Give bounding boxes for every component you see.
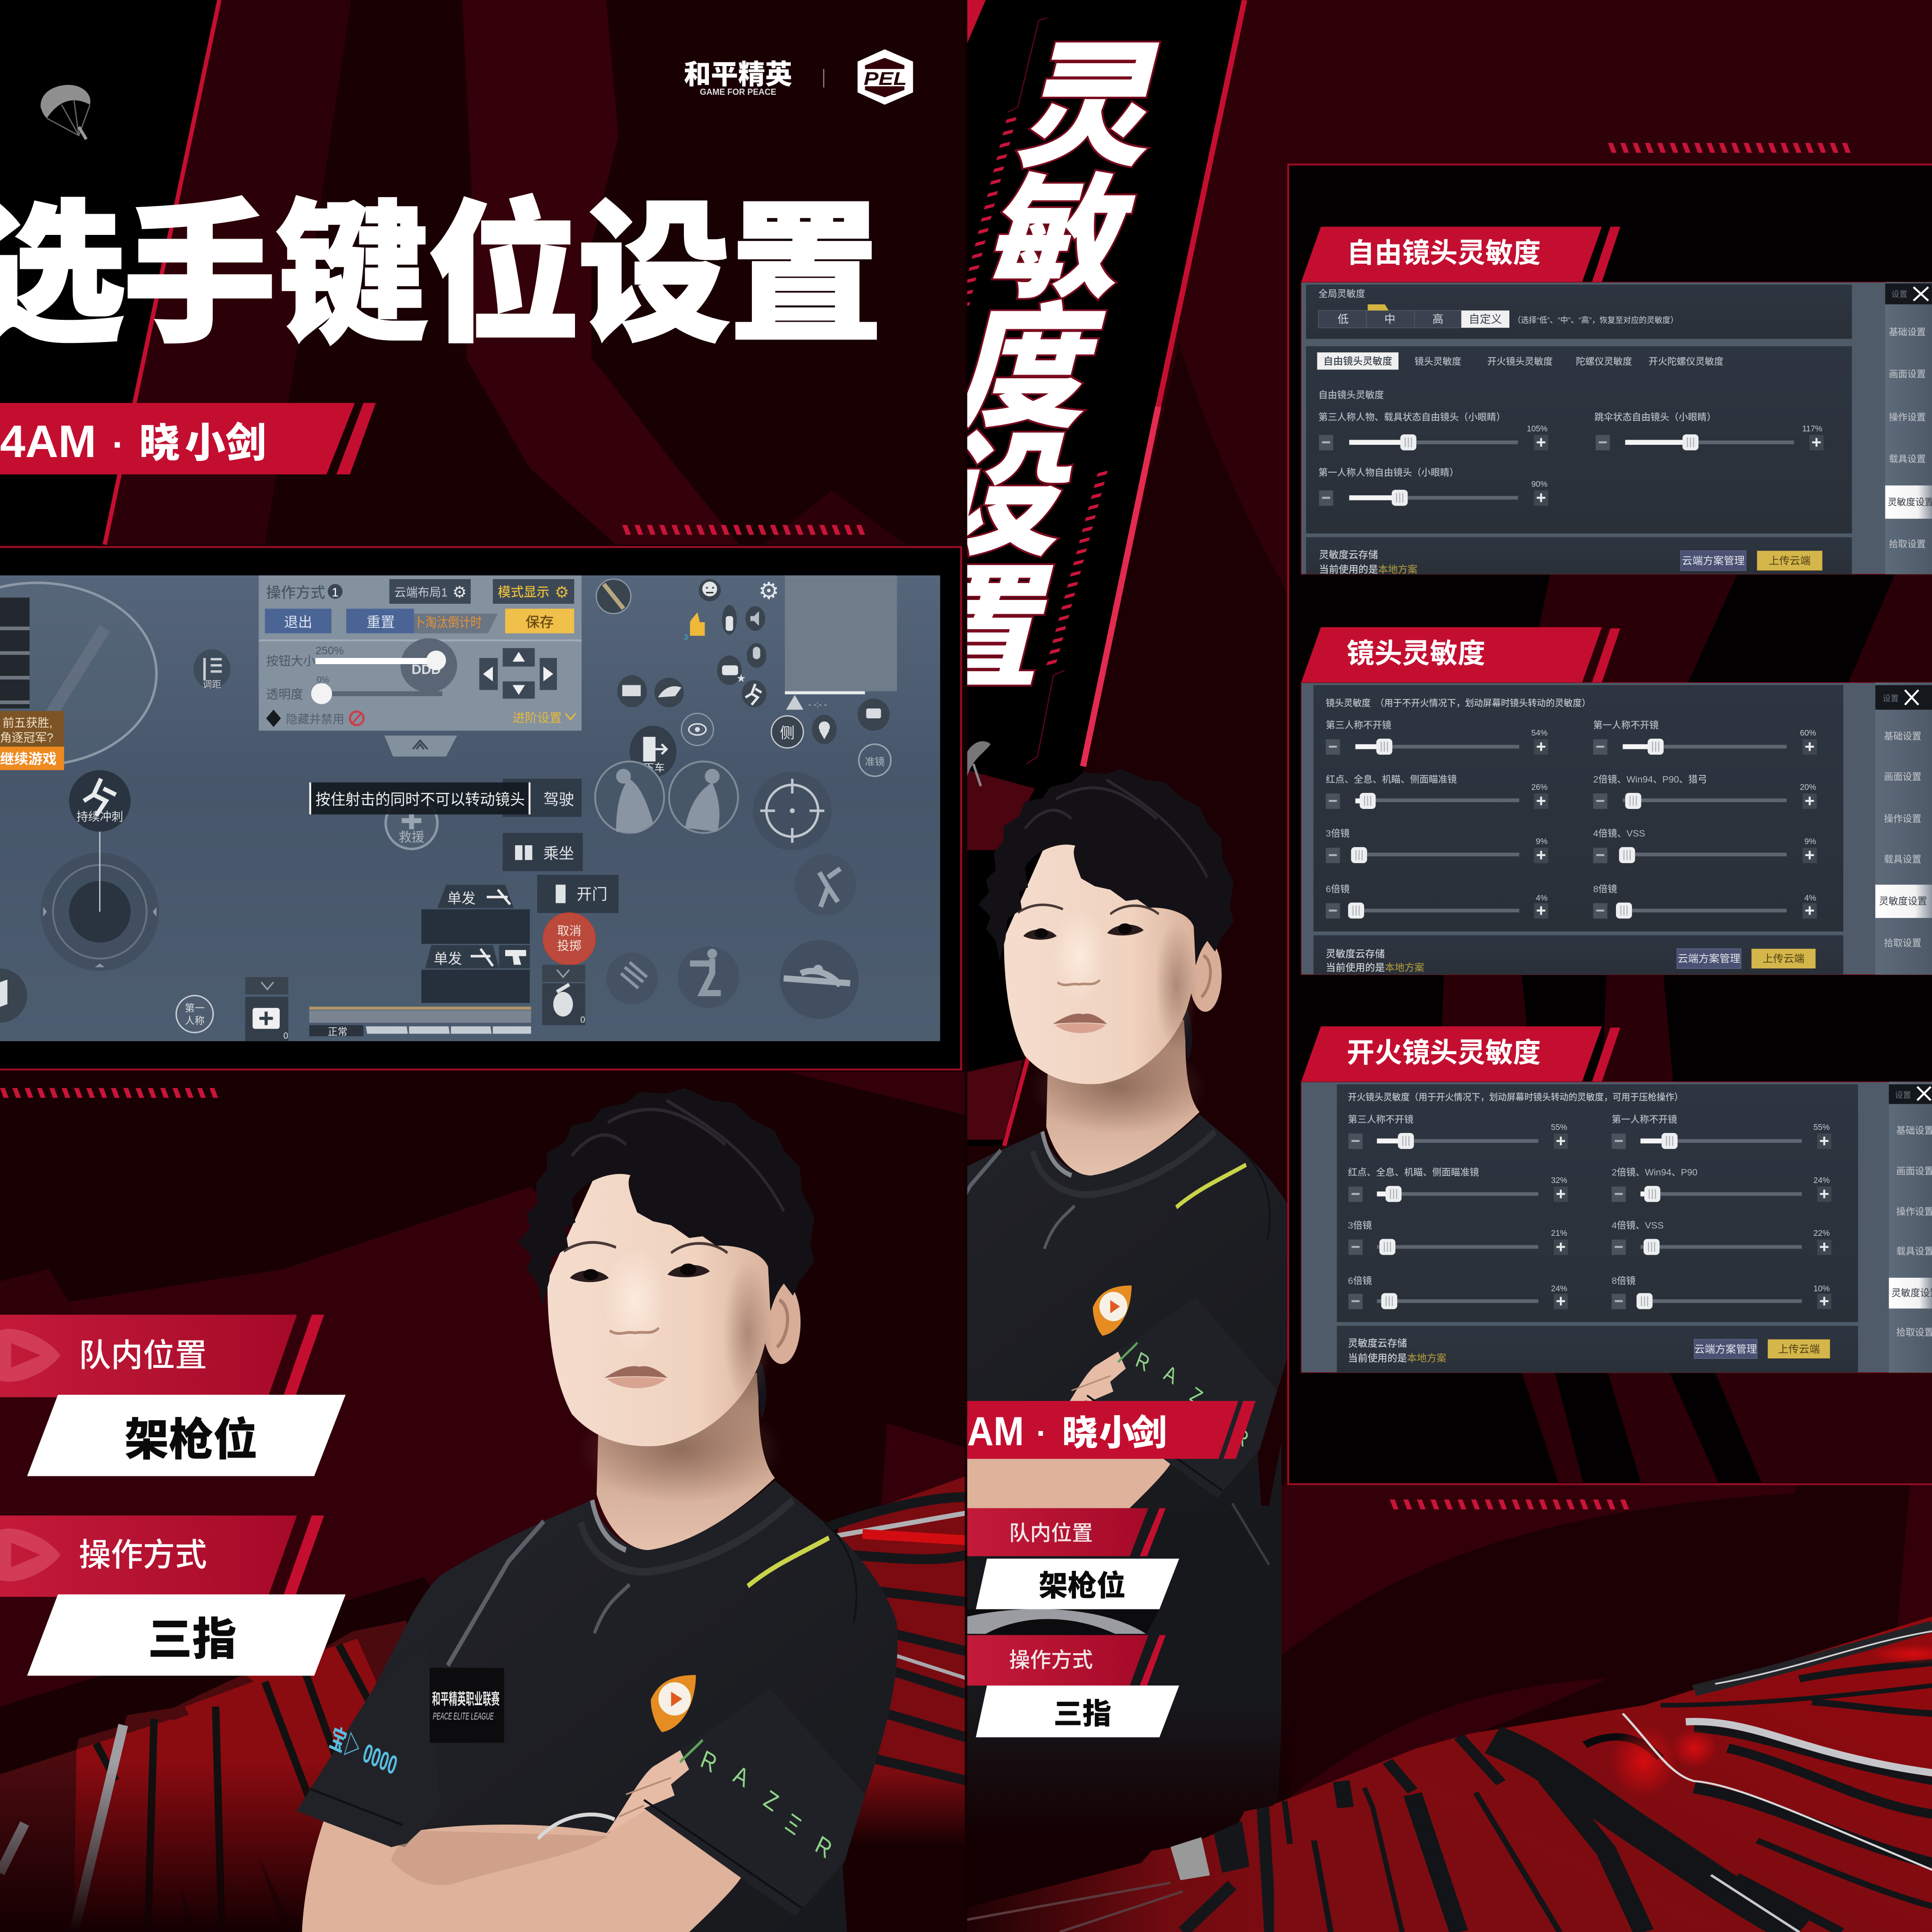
slider row: 4x 9% [1593, 829, 1817, 863]
rescue button: 救援 [399, 830, 425, 844]
panel: free camera sensitivity: 中 [1384, 313, 1395, 325]
settings panel: 0% [316, 675, 329, 684]
slider row: firing first person 55% [1612, 1115, 1832, 1149]
position value left [27, 1395, 346, 1476]
drive button [503, 779, 582, 817]
icon: parachute right [966, 741, 991, 786]
name banner left: 4AM [0, 416, 96, 467]
settings panel: 保存 [525, 615, 554, 631]
settings panel: 模式显示 [498, 584, 550, 599]
slider row: 2x 20% [1593, 774, 1817, 809]
seat button: 乘坐 [543, 845, 574, 862]
panel: free camera sensitivity: 操作设置 [1889, 412, 1926, 423]
right frame: sensitivity screenshots [1288, 165, 1932, 1484]
logo: PEL: PEL [864, 69, 907, 89]
slider row: firing third person 55%: 第三人称不开镜 [1348, 1115, 1414, 1125]
drive button: 驾驶 [543, 791, 574, 808]
slider row: third person no scope 54%: 第三人称不开镜 [1326, 720, 1391, 731]
panel: free camera sensitivity: 基础设置 [1889, 327, 1926, 338]
panel: free camera sensitivity [1301, 227, 1932, 575]
slider row: parachute free look 117%: 跳伞状态自由镜头（小眼睛） [1594, 412, 1716, 423]
name banner left: · [112, 424, 125, 465]
rescue button [386, 797, 437, 849]
position value right [976, 1558, 1179, 1609]
slider row: red dot 26%: 26% [1531, 782, 1548, 791]
grenade slot: 0 [580, 1015, 585, 1024]
ribbon continuation under right portrait [967, 1801, 1294, 1932]
slider row: 3x 9%: 3倍镜 [1326, 829, 1350, 839]
settings panel: 隐藏并禁用 [286, 713, 344, 726]
settings panel [259, 575, 582, 731]
lean toggle button [771, 716, 803, 748]
vertical title: sensitivity settings: 度 [941, 260, 1124, 454]
settings panel: 250% [316, 644, 344, 657]
slider row: firing 6x 24%: 24% [1551, 1284, 1567, 1293]
panel: free camera sensitivity: 自由镜头灵敏度 [1324, 356, 1392, 367]
right panel background [967, 0, 1932, 1932]
slider row: firing red dot 32%: 红点、全息、机瞄、侧面瞄准镜 [1348, 1167, 1479, 1178]
top right icons cluster: ⚙ [758, 578, 779, 604]
jump button [795, 854, 857, 916]
lean toggle button: 侧 [780, 725, 795, 741]
fire mode slot 2 [421, 945, 530, 1003]
panel: firing camera sensitivity: 开火镜头灵敏度（用于开火情况下，划动屏幕时镜头转动的灵敏度，可用于压枪操作） [1348, 1092, 1683, 1103]
panel: free camera sensitivity: 镜头灵敏度 [1415, 357, 1461, 367]
panel: camera sensitivity: 载具设置 [1884, 855, 1922, 865]
slider row: firing 3x 21%: 21% [1551, 1228, 1567, 1238]
slider row: 8x 4% [1593, 884, 1817, 918]
sprint button: 持续冲刺 [76, 810, 123, 824]
control value right: 三指 [1053, 1690, 1111, 1732]
title: player key settings: 选手键位设置 [0, 151, 882, 372]
hazard stripes top of right frame [1608, 143, 1851, 153]
slider row: firing 6x 24%: 6倍镜 [1348, 1276, 1372, 1286]
slider row: red dot 26%: 红点、全息、机瞄、侧面瞄准镜 [1326, 774, 1457, 785]
lean right button [669, 761, 738, 833]
control value right [976, 1686, 1179, 1737]
panel: free camera sensitivity: 开火镜头灵敏度 [1487, 357, 1553, 367]
slider row: 2x 20%: 20% [1800, 782, 1816, 791]
exit vehicle button: 下车 [644, 762, 665, 774]
slider row: firing 2x 24%: 2倍镜、Win94、P90 [1612, 1167, 1698, 1178]
slider row: firing red dot 32% [1348, 1167, 1568, 1202]
distance button: 调距 [203, 680, 221, 690]
settings panel: ⚙ [555, 583, 569, 601]
slider row: 6x 4%: 6倍镜 [1326, 884, 1350, 894]
hazard stripes top [622, 525, 865, 535]
chat button [858, 699, 890, 731]
crouch button [678, 946, 739, 1008]
header: free camera [1301, 227, 1620, 282]
panel: free camera sensitivity: 画面设置 [1889, 369, 1926, 379]
slider row: 6x 4% [1326, 884, 1548, 918]
panel: free camera sensitivity: 自由镜头灵敏度 [1318, 390, 1384, 400]
door button: 开门 [577, 885, 608, 903]
seat button [503, 833, 583, 871]
vertical title: sensitivity settings: 敏 [974, 131, 1156, 325]
first person button [176, 996, 213, 1033]
orange popup: 前五获胜, [2, 716, 52, 730]
settings panel: 透明度 [266, 687, 303, 701]
collapse tab [384, 736, 457, 757]
panel: free camera sensitivity: 拾取设置 [1889, 539, 1926, 550]
position label right: 队内位置 [1009, 1516, 1093, 1546]
settings panel: 卜淘汰倒计时 [414, 616, 482, 631]
slider row: firing 3x 21% [1348, 1220, 1568, 1255]
slider row: parachute free look 117% [1594, 412, 1824, 450]
distance button [193, 650, 230, 690]
panel: free camera sensitivity: （选择“低”、“中”、“高”，恢复至对应的灵敏度） [1513, 316, 1678, 325]
slider row: first person free look 90% [1318, 467, 1548, 506]
header: camera: 镜头灵敏度 [1347, 631, 1485, 671]
name banner left: 晓小剑 [139, 410, 266, 469]
name banner right [967, 1401, 1256, 1459]
slider row: first person no scope 60% [1593, 720, 1817, 755]
fire mode slot 1 [421, 885, 530, 944]
panel: camera sensitivity: 上传云端 [1763, 953, 1805, 965]
orange popup [0, 711, 64, 770]
slider row: firing first person 55%: 第一人称不开镜 [1612, 1115, 1677, 1125]
scope button [859, 744, 891, 776]
orange popup: 继续游戏 [0, 752, 57, 767]
cancel throw button: 投掷 [557, 939, 581, 953]
slider row: firing third person 55% [1348, 1115, 1568, 1149]
logo: game for peace: 和平精英 [684, 52, 792, 92]
panel: firing camera sensitivity: 上传云端 [1778, 1343, 1820, 1355]
logo: PEL [858, 49, 913, 105]
control value left: 三指 [148, 1604, 237, 1668]
slider row: 8x 4%: 8倍镜 [1593, 884, 1617, 894]
left compass ring and weapon circle [0, 583, 157, 765]
status bar [309, 1007, 531, 1037]
slider row: firing 6x 24% [1348, 1276, 1568, 1309]
logo: game for peace: GAME FOR PEACE [700, 87, 776, 97]
name banner right: AM [967, 1409, 1024, 1454]
game screenshot frame [0, 547, 961, 1069]
position value right: 架枪位 [1039, 1562, 1125, 1604]
slider row: parachute free look 117%: 117% [1802, 424, 1823, 433]
slider row: 3x 9%: 9% [1536, 836, 1548, 846]
header: camera [1301, 627, 1620, 683]
slider row: third person no scope 54% [1326, 720, 1548, 755]
door button [537, 875, 618, 913]
exit vehicle button [630, 726, 676, 777]
slider row: 8x 4%: 4% [1805, 893, 1816, 903]
grenade slot [542, 965, 585, 1025]
slider row: first person free look 90%: 第一人称人物自由镜头（小眼睛） [1318, 467, 1459, 478]
slider row: firing 4x 22%: 4倍镜、VSS [1612, 1220, 1664, 1231]
fire mode slot 2: 单发 [434, 951, 462, 967]
panel: firing camera sensitivity: 设置 [1895, 1091, 1911, 1100]
panel: free camera sensitivity: 自定义 [1469, 313, 1502, 325]
panel: firing camera sensitivity: 当前使用的是本地方案 [1348, 1353, 1447, 1364]
slider row: third person free look 105%: 105% [1527, 424, 1548, 433]
first person button: 第一 [185, 1003, 205, 1014]
vertical title: sensitivity settings: 置 [895, 520, 1077, 714]
panel: free camera sensitivity: 开火陀螺仪灵敏度 [1649, 357, 1724, 367]
slider row: firing 4x 22%: 22% [1814, 1228, 1830, 1238]
slider row: firing 2x 24%: 24% [1814, 1175, 1830, 1185]
slider row: firing red dot 32%: 32% [1551, 1175, 1567, 1185]
lean left button [595, 761, 664, 833]
slider row: firing 2x 24% [1612, 1167, 1832, 1202]
panel: free camera sensitivity: 灵敏度云存储 [1319, 550, 1378, 560]
panel: camera sensitivity: 灵敏度云存储 [1326, 949, 1385, 960]
map pin button [812, 715, 837, 744]
panel: firing camera sensitivity: 灵敏度云存储 [1348, 1338, 1407, 1349]
minimap [785, 575, 897, 710]
vertical title: sensitivity settings: 设 [915, 388, 1097, 583]
left weapon strip [0, 598, 30, 708]
left ribbon graphic [0, 1476, 966, 1932]
settings panel: 云端布局1 [394, 586, 448, 599]
slider row: third person free look 105% [1318, 412, 1548, 450]
panel: free camera sensitivity: 上传云端 [1769, 555, 1811, 566]
eye button [682, 713, 713, 745]
slider row: 3x 9% [1326, 829, 1548, 863]
scope button: 准镜 [865, 757, 885, 767]
panel: firing camera sensitivity [1301, 1026, 1932, 1373]
vertical title: sensitivity settings [967, 41, 1161, 687]
inventory cube [0, 968, 27, 1023]
panel: free camera sensitivity: 高 [1432, 313, 1443, 325]
tooltip: cannot rotate camera while firing [309, 783, 531, 815]
name banner left [0, 403, 376, 475]
settings panel: 按钮大小 [266, 654, 316, 668]
position label left: 队内位置 [79, 1329, 207, 1376]
status bar: 正常 [328, 1026, 348, 1037]
panel: camera sensitivity: 灵敏度设置 [1879, 896, 1927, 907]
slider row: 6x 4%: 4% [1536, 893, 1548, 903]
panel: free camera sensitivity: 低 [1338, 313, 1349, 325]
panel: free camera sensitivity: 当前使用的是本地方案 [1319, 565, 1417, 575]
slider row: firing 8x 10% [1612, 1276, 1832, 1309]
reload button [606, 952, 658, 1004]
aim button [753, 771, 832, 850]
settings panel: 操作方式 [266, 584, 325, 601]
panel: firing camera sensitivity: 云端方案管理 [1694, 1343, 1757, 1355]
top right icons cluster [596, 578, 779, 707]
settings panel: 退出 [284, 615, 312, 631]
panel: camera sensitivity: 镜头灵敏度 （用于不开火情况下，划动屏幕时镜头转动的灵敏度） [1326, 698, 1591, 708]
position value left: 架枪位 [125, 1404, 258, 1468]
panel: free camera sensitivity: 全局灵敏度 [1318, 289, 1365, 300]
name banner right: 晓小剑 [1062, 1404, 1167, 1456]
icon: parachute left [41, 85, 91, 139]
slider row: 4x 9%: 9% [1805, 836, 1816, 846]
settings panel: ⚙ [452, 583, 467, 601]
lower torso of right portrait [967, 1441, 1282, 1836]
control label left [0, 1516, 324, 1597]
sprint button [69, 770, 131, 832]
position label left [0, 1315, 324, 1397]
control label right: 操作方式 [1009, 1642, 1093, 1673]
title side stripes upper [967, 117, 1017, 306]
minimap: - -:- - [808, 699, 827, 709]
medkit slot: 0 [283, 1031, 288, 1041]
hazard stripes under game frame [0, 1088, 218, 1098]
cancel throw button [543, 913, 595, 965]
panel: camera sensitivity: 当前使用的是本地方案 [1326, 962, 1424, 973]
first person button: 人称 [185, 1016, 205, 1026]
panel: camera sensitivity: 操作设置 [1884, 814, 1922, 824]
slider row: third person no scope 54%: 54% [1531, 728, 1548, 738]
settings panel: 1 [332, 585, 339, 599]
slider row: first person no scope 60%: 第一人称不开镜 [1593, 720, 1659, 731]
settings panel: DDD [411, 662, 441, 677]
panel: free camera sensitivity: 云端方案管理 [1682, 555, 1745, 566]
slider row: third person free look 105%: 第三人称人物、载具状态自由镜头（小眼睛） [1318, 412, 1506, 423]
thin title bracket lines [1008, 18, 1065, 764]
fire mode slot 1: 单发 [447, 891, 475, 907]
panel: camera sensitivity: 云端方案管理 [1678, 953, 1740, 965]
slider row: red dot 26% [1326, 774, 1548, 809]
panel: camera sensitivity: 拾取设置 [1884, 938, 1922, 949]
slider row: firing 4x 22% [1612, 1220, 1832, 1255]
right ribbon graphic [1274, 1616, 1932, 1932]
settings panel: 进阶设置 [513, 711, 562, 725]
prone button [780, 940, 859, 1019]
medkit slot [245, 977, 288, 1041]
top right icons cluster: ★ [737, 674, 745, 683]
control label left: 操作方式 [79, 1529, 207, 1575]
slider row: firing first person 55%: 55% [1814, 1122, 1830, 1132]
top right icons cluster: 3 [684, 633, 688, 641]
movement joystick [41, 825, 159, 971]
panel: free camera sensitivity: 设置 [1891, 290, 1907, 299]
header: free camera: 自由镜头灵敏度 [1347, 230, 1541, 270]
player portrait left [297, 1088, 898, 1932]
settings panel: 重置 [366, 615, 395, 631]
player portrait right [967, 769, 1290, 1799]
control label right [967, 1635, 1166, 1686]
position label right [967, 1508, 1166, 1556]
slider row: firing third person 55%: 55% [1551, 1122, 1567, 1132]
tooltip: cannot rotate camera while firing: 按住射击的同时不可以转动镜头 [316, 791, 525, 808]
control value left [27, 1594, 346, 1676]
title side stripes lower [1046, 471, 1108, 666]
panel: camera sensitivity: 画面设置 [1884, 772, 1922, 783]
slider row: first person no scope 60%: 60% [1800, 728, 1816, 738]
vertical title: sensitivity settings: 灵 [1004, 0, 1187, 193]
panel: camera sensitivity [1301, 627, 1932, 974]
slider row: firing 8x 10%: 8倍镜 [1612, 1276, 1636, 1286]
slider row: 4x 9%: 4倍镜、VSS [1593, 829, 1645, 839]
slider row: 2x 20%: 2倍镜、Win94、P90、猎弓 [1593, 774, 1707, 785]
panel: free camera sensitivity: 载具设置 [1889, 454, 1926, 465]
header: firing camera [1301, 1026, 1620, 1082]
slider row: firing 3x 21%: 3倍镜 [1348, 1220, 1372, 1231]
divider between logos [823, 69, 824, 87]
left panel background [0, 0, 965, 1707]
header: firing camera: 开火镜头灵敏度 [1347, 1030, 1541, 1070]
cancel throw button: 取消 [557, 924, 581, 938]
name banner right: · [1036, 1416, 1047, 1451]
panel: free camera sensitivity: 陀螺仪灵敏度 [1576, 357, 1632, 367]
panel: camera sensitivity: 设置 [1883, 694, 1899, 703]
slider row: first person free look 90%: 90% [1531, 479, 1548, 489]
hazard stripes bottom of right frame [1390, 1499, 1629, 1509]
panel: camera sensitivity: 基础设置 [1884, 731, 1922, 741]
orange popup: 角逐冠军? [0, 732, 53, 745]
slider row: firing 8x 10%: 10% [1814, 1284, 1830, 1293]
